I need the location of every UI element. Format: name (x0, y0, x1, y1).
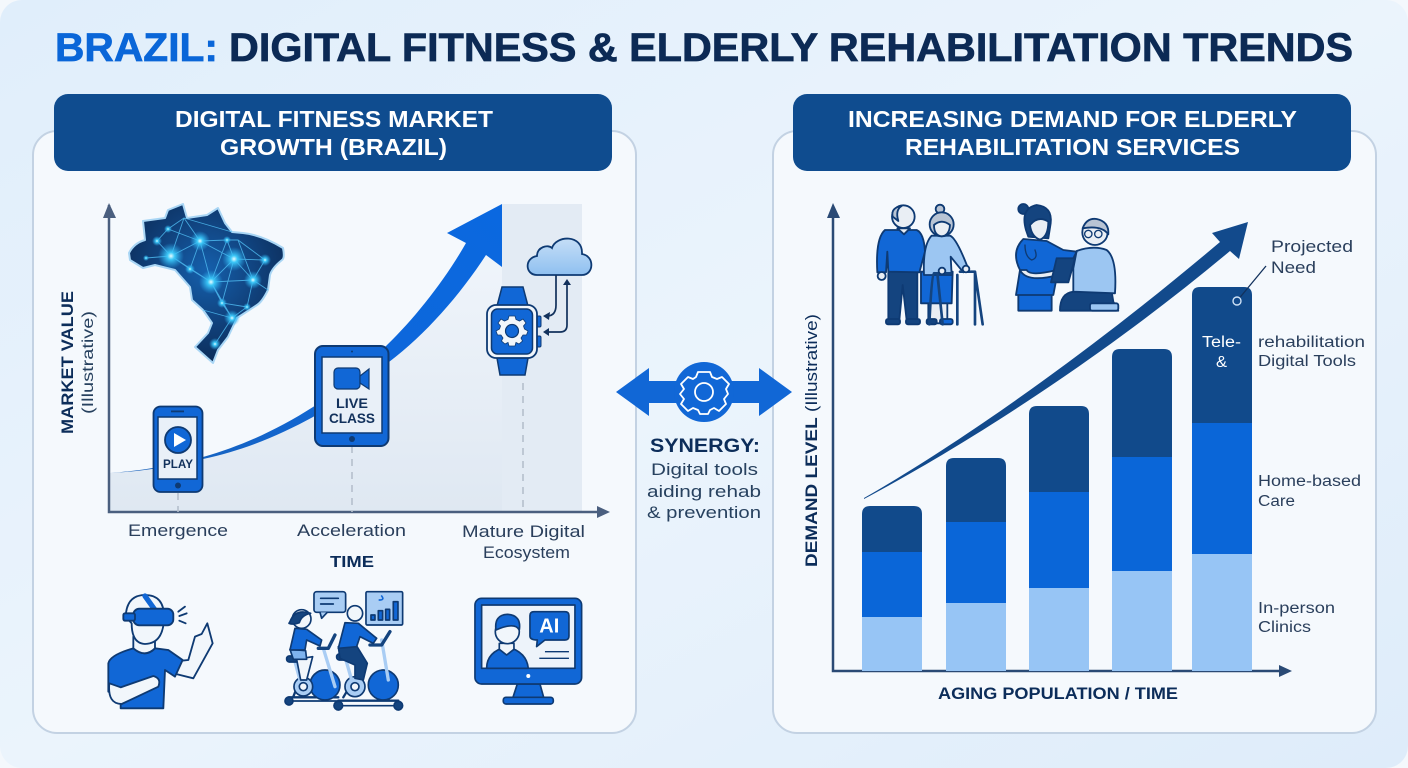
callout: projected need (1233, 238, 1353, 305)
icon: AI video coach monitor: AI (539, 615, 559, 637)
icon: connected exercise bikes (285, 592, 403, 710)
legend labels: Clinics (1258, 619, 1311, 636)
synergy text (647, 436, 761, 522)
y axis label: market value: MARKET VALUE (58, 291, 77, 434)
panel: elderly rehabilitation demand (773, 94, 1376, 733)
x axis stage labels (128, 522, 585, 562)
y axis label: market value: (Illustrative) (80, 311, 97, 414)
synergy text: & prevention (647, 503, 761, 522)
panel: digital fitness market growth (33, 94, 636, 733)
y axis label: demand level: DEMAND LEVEL (Illustrative) (803, 314, 821, 567)
x axis stage labels: Emergence (128, 522, 228, 540)
synergy connector (616, 362, 792, 522)
legend labels: Home-based (1258, 473, 1361, 490)
x axis stage labels: Acceleration (297, 522, 406, 540)
legend labels: Digital Tools (1258, 353, 1356, 370)
legend labels: Care (1258, 493, 1295, 510)
callout: projected need: Need (1271, 259, 1316, 277)
panel heading: digital fitness: GROWTH (BRAZIL) (220, 134, 447, 160)
bar 4 (1112, 349, 1172, 671)
bar label: tele (1202, 334, 1241, 371)
bar 5 (1192, 287, 1252, 671)
callout: projected need: Projected (1271, 238, 1353, 256)
legend labels: rehabilitation (1258, 334, 1365, 351)
legend labels: In-person (1258, 600, 1335, 617)
icon: AI video coach monitor (475, 598, 582, 704)
panel heading: digital fitness: DIGITAL FITNESS MARKET (175, 106, 493, 132)
synergy text: SYNERGY: (650, 436, 760, 457)
trend arrow (864, 222, 1248, 499)
icon: cloud (528, 239, 591, 275)
icon: phone PLAY (154, 406, 202, 492)
icon: Brazil network map (129, 204, 284, 363)
growth arrow (110, 204, 502, 473)
synergy text: Digital tools (651, 460, 758, 479)
x axis stage labels: Mature Digital (462, 523, 585, 541)
icon: elderly couple with walker (877, 205, 983, 324)
icon: tablet LIVE CLASS: LIVE (336, 396, 368, 411)
panel heading: digital fitness (54, 94, 612, 171)
bar label: tele: Tele- (1202, 334, 1241, 351)
title: DIGITAL FITNESS & ELDERLY REHABILITATION TRENDS (229, 26, 1353, 70)
panel heading: elderly rehabilitation: INCREASING DEMAND FOR ELDERLY (848, 106, 1297, 132)
icon: double arrow with gear (616, 362, 792, 422)
chart: market growth curve (103, 203, 610, 518)
bar 1 (862, 506, 922, 671)
bar 3 (1029, 406, 1089, 671)
x axis title: aging population: AGING POPULATION / TIME (938, 685, 1178, 703)
icon: VR user (108, 595, 213, 708)
icon: smartwatch with cloud sync (487, 239, 591, 375)
icon: phone PLAY: PLAY (163, 459, 193, 471)
synergy text: aiding rehab (647, 482, 761, 501)
bar label: tele: & (1216, 354, 1228, 371)
bar 2 (946, 458, 1006, 671)
panel heading: elderly rehabilitation: REHABILITATION SERVICES (905, 134, 1240, 160)
icon: tablet LIVE CLASS (315, 346, 388, 446)
y axis label: market value (58, 291, 97, 434)
title: BRAZIL: (55, 26, 218, 70)
legend labels (1258, 334, 1365, 636)
icon: nurse with elderly patient (1016, 204, 1118, 311)
x axis stage labels: Ecosystem (483, 544, 570, 562)
stacked bar chart: demand (827, 203, 1292, 677)
x axis title: time: TIME (330, 554, 374, 571)
panel heading: elderly rehabilitation (793, 94, 1351, 171)
icon: tablet LIVE CLASS: CLASS (329, 411, 375, 426)
